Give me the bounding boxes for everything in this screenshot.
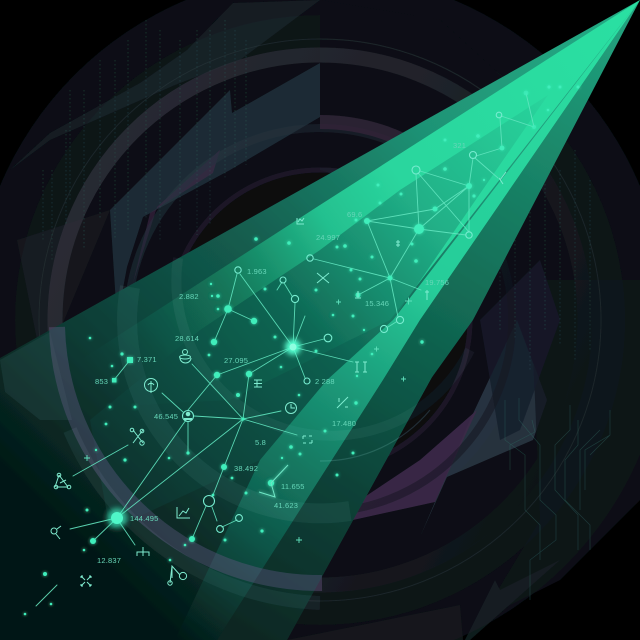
data labels: 853 [95, 377, 108, 386]
icon: small bars top [297, 218, 304, 224]
data labels: 15.346 [365, 299, 389, 308]
light beam: right edge strip [217, 0, 640, 640]
icon: bars [355, 362, 367, 372]
data labels: 12.837 [97, 556, 121, 565]
matrix code columns [43, 20, 590, 370]
icon: list [254, 380, 262, 387]
icon: share [51, 526, 61, 539]
data labels: 69.6 [347, 210, 362, 219]
data labels: 27.095 [224, 356, 248, 365]
light beam: lower right band [175, 0, 640, 640]
icon: hierarchy [137, 547, 149, 556]
light beam: central darker wedge [90, 95, 548, 530]
icons [51, 172, 506, 586]
icon: user in node [184, 412, 192, 419]
icon: antenna [144, 378, 158, 393]
data labels: 38.492 [234, 464, 258, 473]
data labels: 46.545 [154, 412, 178, 421]
data labels: 2.882 [179, 292, 199, 301]
icon: triangle molecule [168, 566, 187, 585]
icon: dollar [396, 240, 400, 247]
light beam: upper bright wedge [0, 0, 640, 412]
data labels: 41.623 [274, 501, 298, 510]
network links [36, 93, 534, 606]
data labels: 19.756 [425, 278, 449, 287]
data labels: 2 288 [315, 377, 335, 386]
hub node 144.495 [107, 508, 127, 528]
ring arcs over beam [57, 258, 470, 603]
node glow [24, 85, 579, 615]
data labels: 28.614 [175, 334, 199, 343]
data labels [95, 141, 466, 565]
icon: pin [499, 172, 506, 184]
data labels: 5.8 [255, 438, 266, 447]
concentric rings [39, 39, 601, 601]
data labels: 11.655 [281, 482, 305, 491]
data labels: 1.963 [247, 267, 267, 276]
icon: arrows [81, 576, 91, 586]
circuit traces [505, 398, 610, 600]
ring nodes [182, 112, 502, 532]
data labels: 24.997 [316, 233, 340, 242]
icon: drone [130, 428, 144, 445]
icon: dash bracket [303, 436, 312, 443]
icon: fraction [337, 397, 348, 408]
data labels: 17.480 [332, 419, 356, 428]
icon: line chart [177, 507, 190, 518]
nodes [24, 85, 579, 615]
icon: cross graph [317, 273, 329, 283]
data labels: 7.371 [137, 355, 157, 364]
data labels: 321 [453, 141, 466, 150]
plus marks [84, 298, 412, 543]
icon: pie clock [286, 402, 296, 414]
icon: tool [425, 290, 429, 300]
data labels: 144.495 [130, 514, 159, 523]
icon: person tip [355, 291, 361, 298]
icon: network triangle [54, 473, 71, 489]
icon: person bowl [180, 350, 191, 363]
central star node [285, 339, 301, 355]
light beam: left grey shard [0, 332, 72, 420]
